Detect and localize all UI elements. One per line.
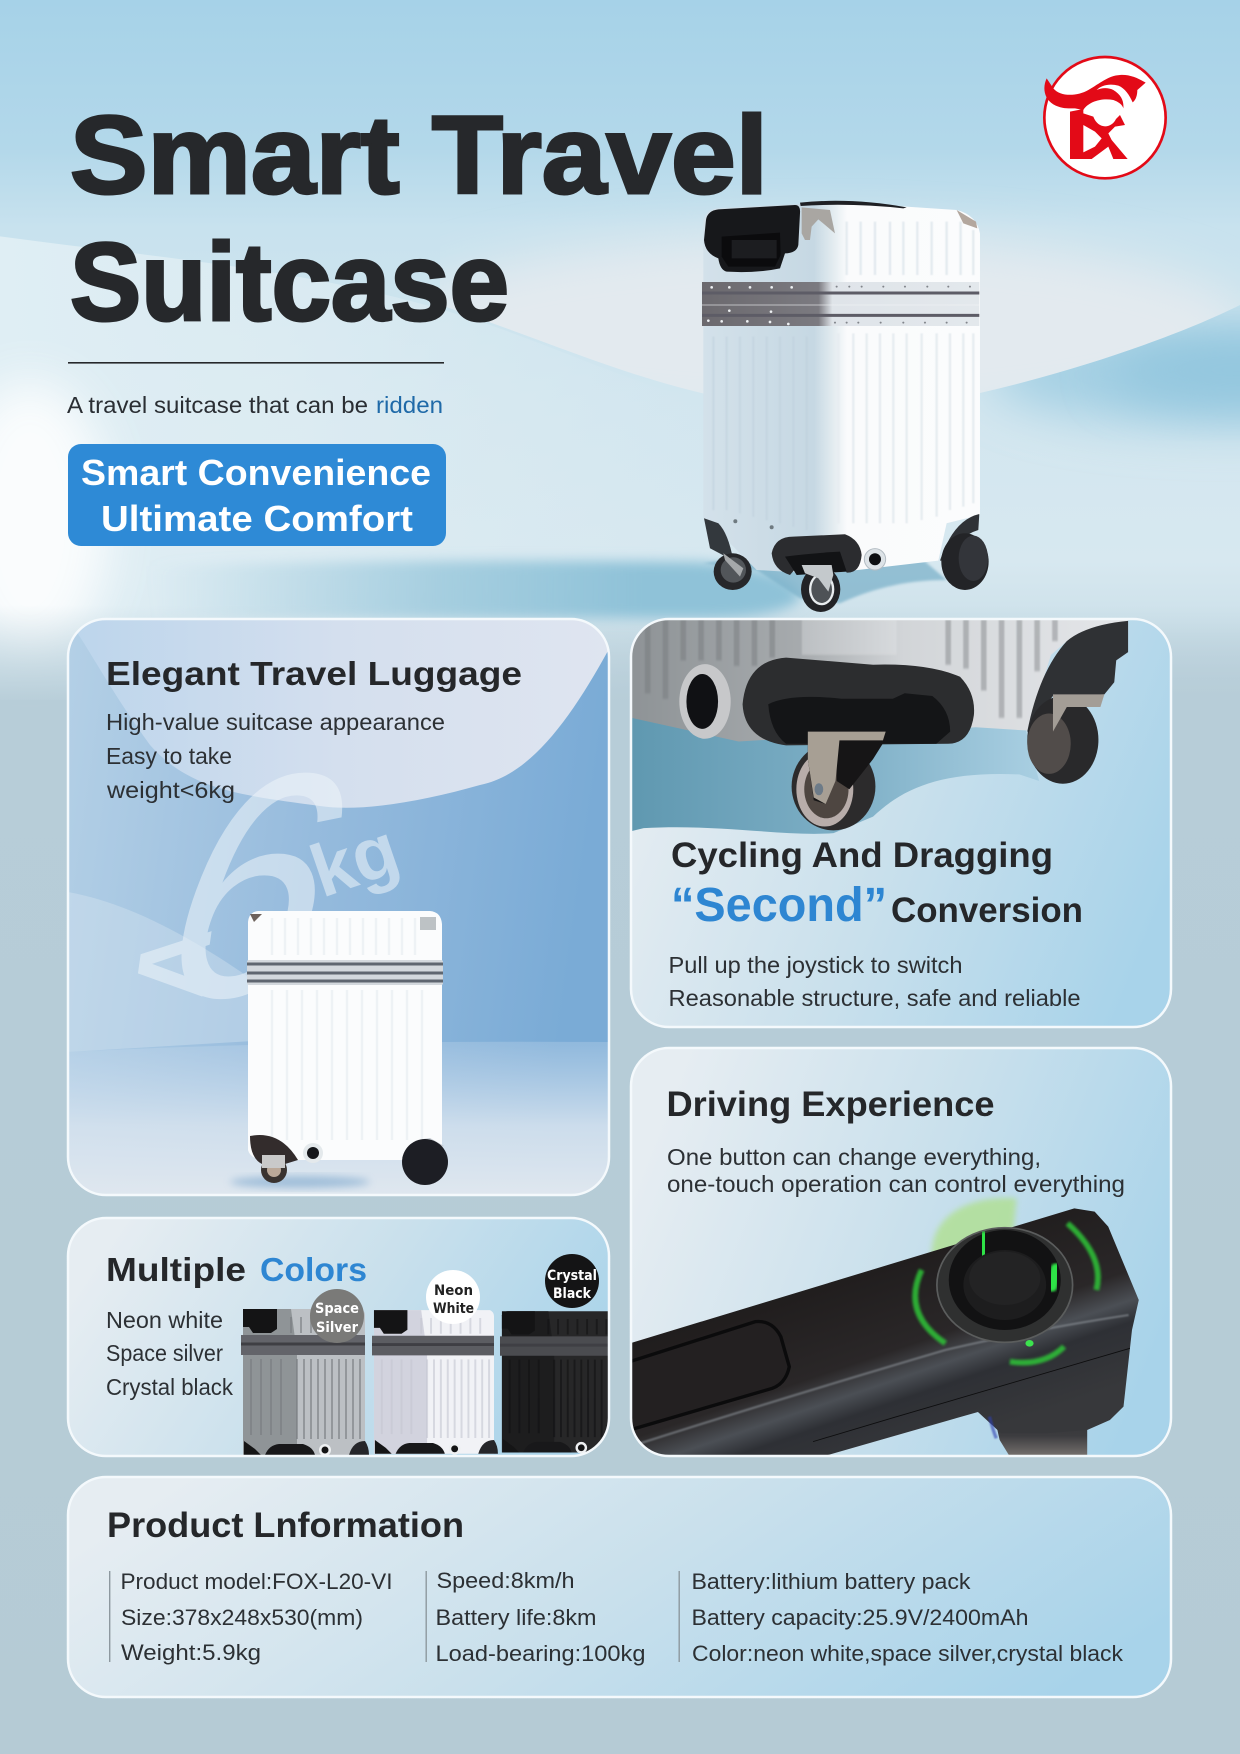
badge: neon white: Neon — [434, 1283, 473, 1299]
badge: crystal black: Crystal — [547, 1268, 597, 1284]
heading: multiple colors: Multiple — [106, 1251, 246, 1288]
text: color list — [106, 1307, 233, 1400]
suitcase: neon white — [372, 1310, 498, 1455]
spec column 2 — [426, 1568, 646, 1666]
text: color list: Crystal black — [106, 1374, 233, 1400]
subtitle: A travel suitcase that can be — [67, 392, 368, 418]
panel: elegant travel luggage — [68, 619, 609, 1195]
suitcase: space silver — [241, 1309, 369, 1456]
heading: second conversion — [671, 879, 1083, 932]
panel: multiple colors — [68, 1218, 624, 1456]
text: luggage features — [106, 709, 445, 803]
text: switching features — [668, 952, 1080, 1011]
main suitcase image — [702, 201, 989, 612]
suitcase front view — [230, 911, 448, 1188]
graphic: less than 6kg: kg — [300, 807, 409, 913]
panel: driving experience — [630, 1048, 1171, 1457]
text: color list: Space silver — [106, 1340, 223, 1366]
spec column 1: Product model:FOX-L20-VI — [120, 1569, 392, 1594]
heading: elegant travel luggage: Elegant Travel Luggage — [106, 655, 522, 692]
badge: neon white: White — [433, 1301, 474, 1317]
text: luggage features: High-value suitcase appearance — [106, 709, 445, 735]
callout: blue tag: Ultimate Comfort — [101, 498, 413, 539]
callout: blue tag — [68, 444, 446, 546]
callout: blue tag: Smart Convenience — [81, 452, 431, 493]
title: Suitcase — [70, 221, 509, 344]
spec column 2: Battery life:8km — [436, 1605, 596, 1630]
graphic: less than 6kg: 6 — [119, 707, 399, 1065]
spec column 2: Load-bearing:100kg — [436, 1641, 646, 1666]
badge: space silver — [310, 1289, 364, 1343]
wheel close-up image — [630, 619, 1128, 834]
suitcase: crystal black — [500, 1311, 608, 1454]
badge: crystal black: Black — [553, 1286, 592, 1302]
heading: cycling and dragging: Cycling And Dragging — [671, 836, 1053, 875]
heading: second conversion: Conversion — [891, 891, 1083, 930]
divider — [68, 362, 444, 364]
text: color list: Neon white — [106, 1307, 223, 1333]
badge: crystal black — [545, 1254, 599, 1308]
text: driving description — [667, 1144, 1125, 1197]
text: switching features: Reasonable structure, safe and reliable — [668, 985, 1080, 1011]
text: luggage features: Easy to take — [106, 743, 232, 769]
text: driving description: One button can change everything, — [667, 1144, 1041, 1170]
spec column 3 — [678, 1569, 1124, 1666]
text: luggage features: weight<6kg — [106, 777, 235, 803]
heading: driving experience: Driving Experience — [666, 1085, 994, 1124]
spec column 2: Speed:8km/h — [436, 1568, 574, 1593]
heading: product information: Product Lnformation — [107, 1506, 464, 1545]
spec column 3: Battery:lithium battery pack — [692, 1569, 972, 1594]
heading: multiple colors — [106, 1251, 367, 1288]
joystick handle image — [630, 1198, 1139, 1457]
background — [0, 0, 1240, 690]
panel: product information — [68, 1477, 1171, 1697]
spec column 1 — [109, 1569, 392, 1665]
text: driving description: one-touch operation can control everything — [667, 1171, 1125, 1197]
subtitle: ridden — [376, 392, 443, 418]
graphic: less than 6kg: < — [124, 895, 222, 1030]
heading: second conversion: “Second” — [671, 879, 887, 932]
logo — [1044, 57, 1166, 178]
spec column 3: Battery capacity:25.9V/2400mAh — [692, 1605, 1028, 1630]
heading: multiple colors: Colors — [260, 1251, 367, 1288]
panel: cycling and dragging — [630, 619, 1171, 1027]
title — [70, 94, 768, 344]
badge: space silver: Silver — [316, 1320, 358, 1336]
text: switching features: Pull up the joystick to switch — [668, 952, 962, 978]
spec column 1: Weight:5.9kg — [121, 1640, 261, 1665]
badge: neon white — [426, 1270, 480, 1324]
spec column 3: Color:neon white,space silver,crystal black — [692, 1641, 1124, 1666]
title: Smart Travel — [70, 94, 768, 217]
badge: space silver: Space — [315, 1301, 359, 1317]
spec column 1: Size:378x248x530(mm) — [121, 1605, 363, 1630]
